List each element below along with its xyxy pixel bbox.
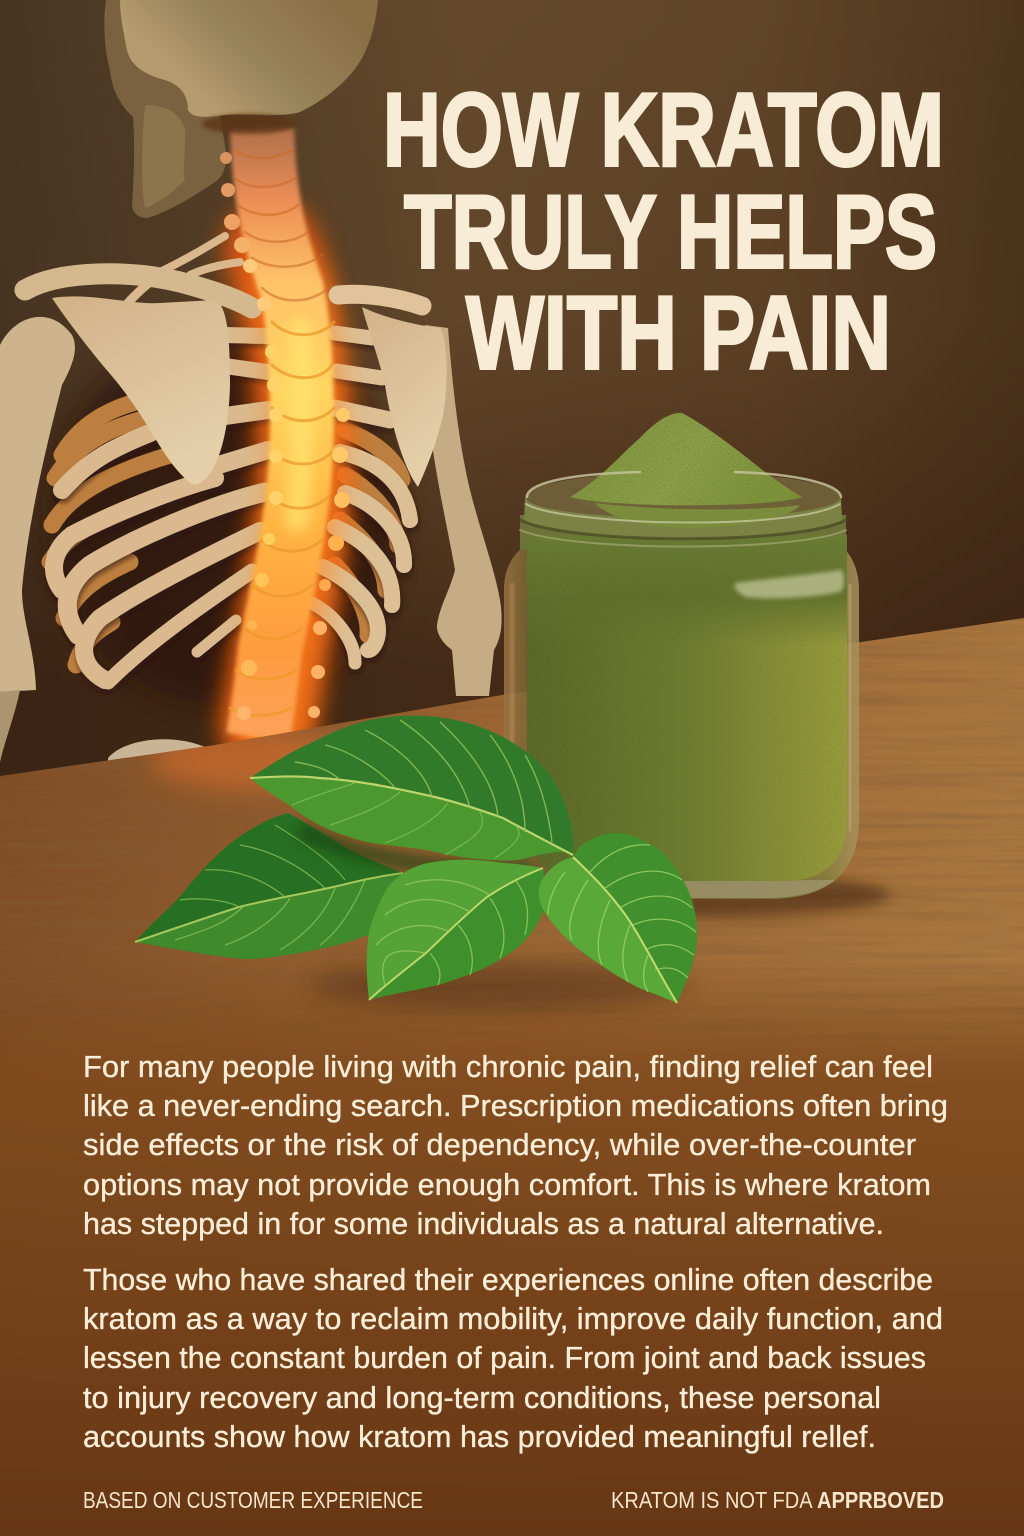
shadow: leaf overlap	[300, 830, 530, 868]
skeleton: right scapula	[362, 307, 447, 487]
footer: left note: BASED ON CUSTOMER EXPERIENCE	[83, 1487, 423, 1513]
skeleton: upper ribs near neck	[120, 236, 240, 312]
paragraph: chronic pain introduction	[83, 1049, 948, 1241]
background wall	[0, 0, 1024, 800]
skeleton: right arm	[425, 325, 502, 696]
skeleton: back ribs	[50, 395, 402, 665]
jar: powder fill	[527, 535, 847, 881]
paragraph: chronic pain introduction: has stepped in for some individuals as a natural alternative.	[83, 1206, 884, 1241]
skeleton: left scapula	[52, 296, 230, 484]
jar: rim back	[525, 472, 841, 522]
paragraph: chronic pain introduction: side effects or the risk of dependency, while over-the-counter	[83, 1127, 916, 1162]
spine: column	[258, 128, 302, 738]
table: fade behind text	[0, 960, 1024, 1536]
spine: vertebra separators lower	[230, 322, 334, 716]
paragraph: chronic pain introduction: For many people living with chronic pain, finding relief can feel	[83, 1049, 933, 1084]
glass jar of kratom powder	[504, 410, 859, 899]
leaf: top	[250, 716, 573, 860]
paragraph: shared experiences: lessen the constant burden of pain. From joint and back issues	[83, 1340, 926, 1375]
spine: side processes	[220, 152, 350, 720]
skeleton: rib cage dark interior	[50, 335, 400, 705]
jar: powder upper shading	[527, 535, 847, 638]
jar: neck	[520, 515, 846, 550]
skeleton: left arm	[0, 317, 75, 692]
leaf: centre	[367, 860, 545, 1000]
skeleton: pelvis hint	[108, 739, 207, 768]
leaves	[135, 716, 697, 1003]
title: WITH PAIN	[466, 276, 891, 392]
jar: powder texture	[527, 568, 847, 881]
title	[383, 72, 944, 392]
leaf: right	[539, 833, 697, 1003]
spine: bright core	[297, 330, 302, 520]
table: surface	[0, 618, 1024, 1536]
paragraph: chronic pain introduction: like a never-ending search. Prescription medications often bring	[83, 1088, 948, 1123]
shadow under jar and leaves	[310, 873, 890, 1009]
paragraph: chronic pain introduction: options may not provide enough comfort. This is where kratom	[83, 1167, 931, 1202]
wooden table	[0, 600, 1024, 1536]
jar: powder inside rim	[595, 503, 800, 528]
spine: vertebra separators	[234, 150, 332, 300]
skull: mandible	[142, 105, 185, 208]
illustration: skeleton with glowing spine	[0, 0, 502, 768]
spine	[202, 114, 350, 738]
paragraph: shared experiences: kratom as a way to reclaim mobility, improve daily function, and	[83, 1301, 943, 1336]
leaf: far left	[135, 813, 403, 959]
paragraph: shared experiences: accounts show how kratom has provided meaningful rellef.	[83, 1419, 876, 1454]
glow: warm tint over ribs near spine	[270, 290, 307, 725]
jar: mound texture	[565, 410, 805, 510]
jar: glare on powder shoulder	[735, 570, 844, 598]
paragraph: shared experiences: Those who have shared their experiences online often describe	[83, 1262, 933, 1297]
table: glow reflection	[150, 730, 360, 790]
skull: cranium	[120, 0, 378, 117]
paragraph: shared experiences	[83, 1262, 943, 1454]
jar: base glass	[560, 880, 835, 898]
skeleton: left forearm	[0, 690, 20, 762]
jar: glass body	[504, 548, 859, 899]
jar: glass highlights	[512, 472, 850, 830]
spine: neck shadow under skull	[202, 114, 298, 134]
table: grain	[282, 618, 1024, 1012]
jar: powder mound	[570, 413, 802, 505]
skeleton: right clavicle	[338, 294, 422, 306]
paragraph: shared experiences: to injury recovery and long-term conditions, these personal	[83, 1380, 881, 1415]
footer: right note: KRATOM IS NOT FDA APPRBOVED	[611, 1487, 944, 1513]
glow: red-orange aura behind ribs	[268, 250, 304, 725]
jar: rim front wall	[524, 497, 842, 539]
skeleton: left front ribs	[54, 335, 268, 682]
skeleton: left clavicle	[25, 274, 252, 308]
skull	[104, 0, 378, 218]
skull: jaw and face	[104, 0, 227, 218]
skeleton: right front ribs	[312, 333, 410, 663]
